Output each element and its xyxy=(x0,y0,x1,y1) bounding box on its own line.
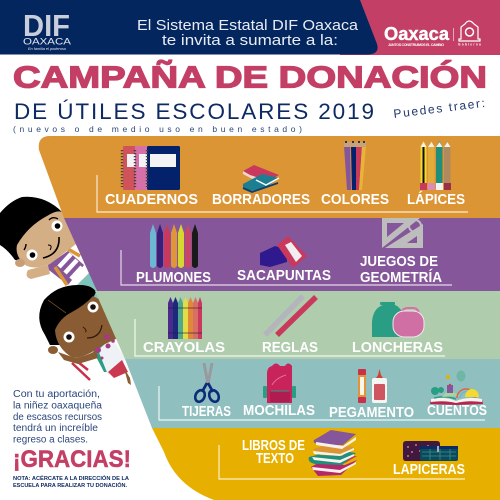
label: plumones: PLUMONES xyxy=(136,269,211,286)
icon: crayons xyxy=(168,297,202,339)
character: boy xyxy=(0,197,100,300)
band: teal xyxy=(125,359,500,428)
icon: lunch boxes xyxy=(372,302,424,337)
label: borradores: BORRADORES xyxy=(212,191,310,208)
character: girl xyxy=(39,285,131,385)
icon: book stack xyxy=(309,430,357,476)
text block: appeal: Con tu aportación, xyxy=(13,389,100,400)
logo: Gobierno de Oaxaca: JUNTOS CONSTRUIMOS EL CAMBIO xyxy=(388,43,444,47)
label: colores: COLORES xyxy=(321,191,389,208)
note under subtitle: (nuevos o de medio uso en buen estado) xyxy=(13,124,302,134)
logo: Gobierno de Oaxaca: Oaxaca xyxy=(384,24,450,44)
label: lapiceras: LAPICERAS xyxy=(393,461,465,478)
label: libros de texto: TEXTO xyxy=(256,450,294,467)
label: crayolas: CRAYOLAS xyxy=(143,339,225,356)
label: sacapuntas: SACAPUNTAS xyxy=(237,267,331,284)
icon: sharpener xyxy=(260,236,307,268)
puedes traer: Puedes traer: xyxy=(393,96,486,121)
brackets xyxy=(97,175,485,479)
note: NOTA: ACÉRCATE A LA DIRECCIÓN DE LA xyxy=(13,474,129,482)
header invitation text: El Sistema Estatal DIF Oaxaca xyxy=(137,17,359,34)
label: mochilas: MOCHILAS xyxy=(243,402,315,419)
logo: DIF Oaxaca: OAXACA xyxy=(23,36,72,48)
logo: DIF Oaxaca: En familia el poderoso xyxy=(28,47,66,51)
subtitle: DE ÚTILES ESCOLARES 2019 xyxy=(14,99,374,124)
text block: appeal xyxy=(13,389,103,446)
text block: appeal: de escasos recursos xyxy=(13,412,102,423)
icon: erasers xyxy=(243,165,279,192)
label: juegos de geometria: JUEGOS DE xyxy=(360,253,438,270)
label: lapices: LÁPICES xyxy=(407,191,465,208)
label: juegos de geometria xyxy=(360,253,442,286)
logo: DIF Oaxaca: DIF xyxy=(23,8,70,43)
label: juegos de geometria: GEOMETRÍA xyxy=(360,269,442,286)
label: reglas: REGLAS xyxy=(262,339,318,356)
title: CAMPAÑA DE DONACIÓN xyxy=(13,58,487,94)
label: pegamento: PEGAMENTO xyxy=(329,404,414,421)
logo: Gobierno de Oaxaca xyxy=(384,21,481,47)
label: libros de texto: LIBROS DE xyxy=(242,437,305,454)
text block: appeal: tendrá un increíble xyxy=(13,423,99,434)
icon: notebooks xyxy=(122,146,180,190)
icon: backpack xyxy=(263,364,296,403)
label: tijeras: TIJERAS xyxy=(182,403,231,420)
header: navy banner xyxy=(0,0,378,54)
note xyxy=(13,474,129,489)
text block: appeal: regreso a clases. xyxy=(13,434,88,446)
header invitation text xyxy=(137,17,359,49)
label: loncheras: LONCHERAS xyxy=(352,339,443,356)
icon: markers xyxy=(150,224,198,268)
icon: rulers xyxy=(265,296,316,335)
label: cuentos: CUENTOS xyxy=(427,402,487,419)
logo: Gobierno de Oaxaca: Gobierno xyxy=(458,42,481,46)
icon: story book xyxy=(430,370,483,405)
band: yellow xyxy=(152,428,500,500)
icon: glue xyxy=(358,369,387,403)
band: green xyxy=(95,291,500,359)
icon: colored pencils xyxy=(344,141,366,190)
icon: geometry set xyxy=(382,218,423,248)
icon: pencil cases xyxy=(403,441,458,461)
icon: pencils xyxy=(420,141,451,190)
band: orange xyxy=(39,136,500,218)
text block: appeal: la niñez oaxaqueña xyxy=(13,400,103,412)
label: cuadernos: CUADERNOS xyxy=(105,191,198,208)
note: ESCUELA PARA REALIZAR TU DONACIÓN. xyxy=(13,481,128,489)
header: pink banner xyxy=(340,0,500,55)
header invitation text: te invita a sumarte a la: xyxy=(162,32,338,49)
icon: scissors xyxy=(193,363,221,403)
thank you: ¡GRACIAS! xyxy=(13,446,131,473)
band: purple xyxy=(64,218,500,291)
label: libros de texto xyxy=(242,437,305,467)
